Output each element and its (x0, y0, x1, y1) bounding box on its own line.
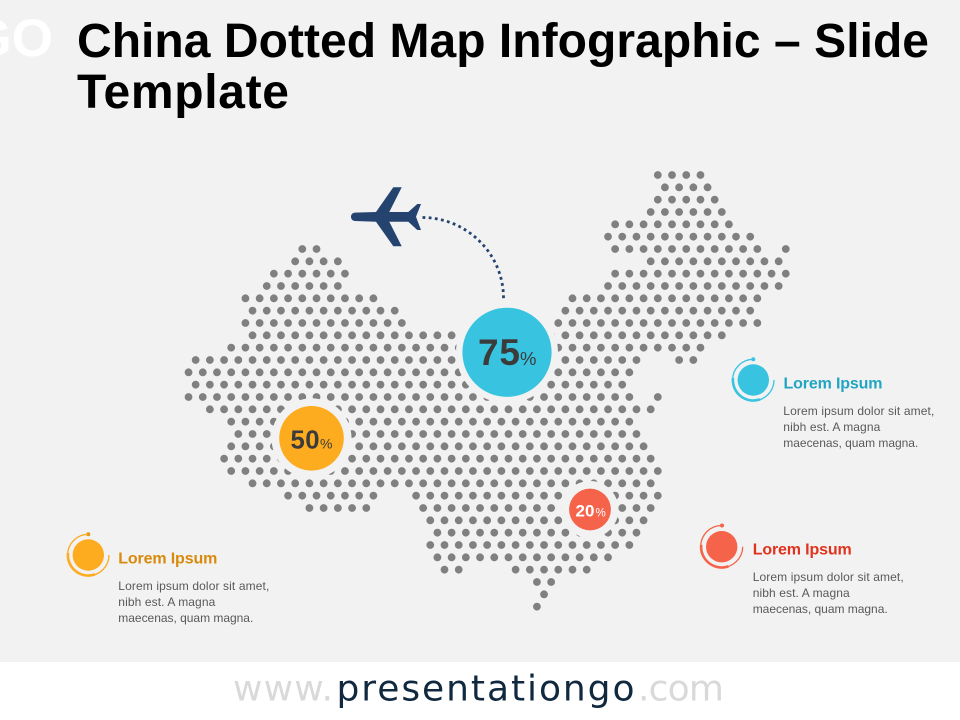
badge: 20 percent: 20 (576, 502, 594, 521)
body text: Lorem ipsum dolor sit amet, (753, 570, 904, 584)
body text: maecenas, quam magna. (118, 611, 253, 625)
body text: maecenas, quam magna. (753, 602, 888, 616)
icon: red orbit disk (701, 524, 743, 568)
body text: nibh est. A magna (118, 595, 216, 609)
icon: orange orbit disk (68, 532, 109, 576)
footer website text: .com (638, 669, 724, 710)
body text: Lorem ipsum dolor sit amet, (118, 579, 269, 593)
body text: Lorem ipsum dolor sit amet, (783, 404, 934, 418)
footer website text: www. (233, 669, 333, 710)
body text: nibh est. A magna (783, 420, 881, 434)
heading: Lorem Ipsum (784, 375, 882, 392)
body text (753, 570, 904, 616)
body text (118, 579, 269, 625)
callout: orange (68, 532, 269, 625)
dotted flight path (422, 218, 504, 298)
dotted map of China (189, 175, 786, 607)
body text: maecenas, quam magna. (783, 436, 918, 450)
heading: Lorem Ipsum (753, 541, 852, 558)
body text (783, 404, 934, 450)
badge: 20 percent: % (596, 507, 606, 520)
badge: 75 percent (456, 301, 558, 403)
icon: blue orbit disk (733, 357, 774, 401)
footer website text: presentationgo (336, 669, 634, 710)
title (77, 15, 929, 119)
callout: red (701, 524, 904, 616)
badge: 75 percent: 75 (478, 332, 520, 373)
body text: nibh est. A magna (753, 586, 850, 600)
badge: 50 percent: % (320, 435, 332, 451)
footer band (0, 662, 960, 720)
callout: blue (733, 357, 934, 450)
badge: 20 percent (562, 481, 618, 538)
heading: Lorem Ipsum (118, 550, 217, 567)
badge: 50 percent (272, 398, 352, 478)
badge: 75 percent: % (520, 348, 536, 369)
title: China Dotted Map Infographic – Slide (77, 15, 929, 68)
airplane icon (351, 187, 421, 246)
badge: 50 percent: 50 (290, 426, 320, 454)
footer website text (233, 669, 724, 710)
title: Template (77, 66, 289, 119)
